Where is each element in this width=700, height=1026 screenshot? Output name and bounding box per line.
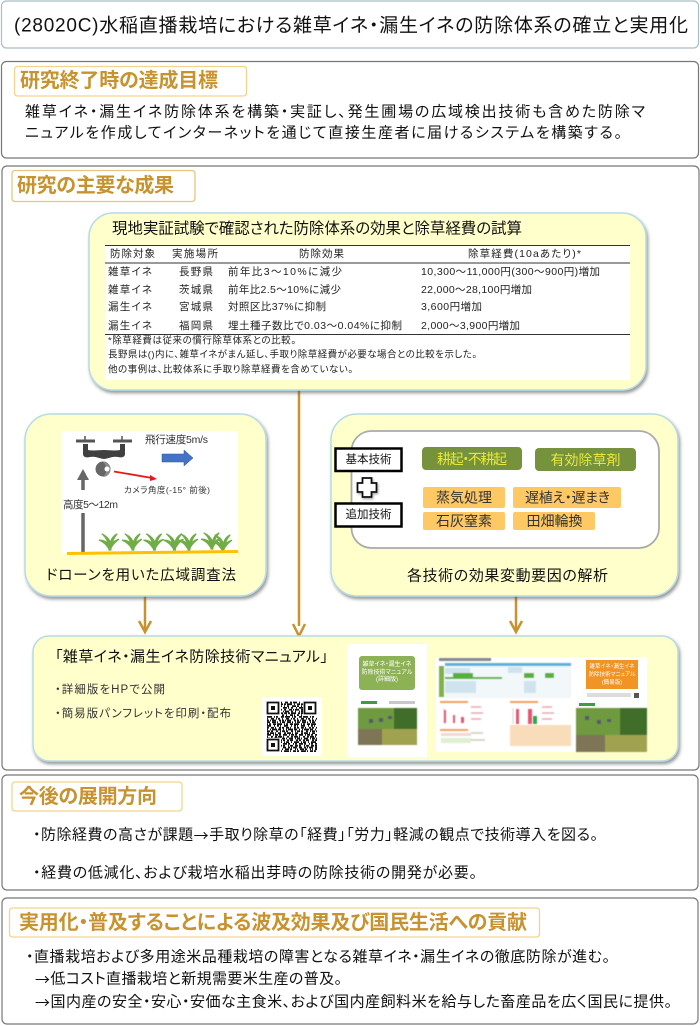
- chip: herbicide: [535, 448, 636, 471]
- panel: field trial table: [89, 213, 646, 390]
- chip: late planting: [513, 487, 621, 508]
- caption: drone survey: ドローンを用いた広域調査法: [46, 567, 236, 584]
- chip: crop rotation: [513, 512, 595, 530]
- chip: lime nitrogen: 石灰窒素: [436, 513, 492, 529]
- heading: future direction: [12, 782, 182, 811]
- text block: contribution: →国内産の安全・安心・安価な主食米、および国内産飼料米を給与した畜産品を広く国民に提供。: [35, 992, 672, 1012]
- table row: Fukuoka: 埋土種子数比で0.03〜0.04%に抑制: [228, 319, 402, 332]
- chip: late planting: 遅植え・遅まき: [525, 490, 610, 506]
- table row: Miyagi: 漏生イネ: [108, 300, 152, 313]
- table row: Nagano: 前年比3〜10%に減少: [228, 265, 342, 278]
- table row: Ibaraki: 雑草イネ: [108, 283, 152, 296]
- table row: Nagano: [108, 265, 600, 278]
- panel: future direction: [2, 775, 698, 890]
- label: added techniques: 追加技術: [346, 507, 392, 521]
- manual bullets: ・詳細版をHPで公開: [55, 682, 165, 696]
- table header row: 実施場所: [172, 247, 218, 260]
- pamphlet cover: [576, 660, 647, 752]
- table row: Nagano: 雑草イネ: [108, 265, 152, 278]
- chip: herbicide: 有効除草剤: [550, 452, 620, 468]
- chip: lime nitrogen: [423, 512, 505, 530]
- manual bullets: ・簡易版パンフレットを印刷・配布: [55, 706, 231, 720]
- table footnotes: [108, 334, 477, 376]
- chip: steam: 蒸気処理: [436, 490, 492, 506]
- label: flight speed: 飛行速度5m/s: [145, 433, 208, 446]
- table row: Ibaraki: 前年比2.5〜10%に減少: [228, 283, 342, 296]
- table header row: 防除対象: [110, 247, 156, 260]
- pamphlet chart page: [439, 658, 571, 746]
- panel: drone survey: [25, 414, 266, 596]
- arrow: drone to manual: [139, 594, 151, 632]
- chip: tillage: [422, 447, 522, 470]
- arrow: altitude: [77, 469, 89, 552]
- text block: contribution: →低コスト直播栽培と新規需要米生産の普及。: [35, 968, 342, 990]
- thumbnail: pamphlet: [436, 657, 647, 752]
- title: (28020C)水稲直播栽培における雑草イネ・漏生イネの防除体系の確立と実用化: [14, 14, 688, 36]
- table row: Ibaraki: 茨城県: [179, 284, 213, 296]
- table header row: 防除効果: [299, 247, 344, 260]
- table header row: [110, 247, 581, 260]
- manual heading: 「雑草イネ・漏生イネ防除技術マニュアル」: [55, 648, 328, 666]
- pamphlet cover: (簡易版): [602, 678, 622, 686]
- chip: crop rotation: 田畑輪換: [526, 513, 582, 529]
- caption: technique analysis: 各技術の効果変動要因の解析: [407, 568, 608, 584]
- pamphlet cover: 防除技術マニュアル: [589, 670, 636, 678]
- label: added techniques: [336, 504, 402, 526]
- table footnotes: 長野県は()内に、雑草イネがまん延し、手取り除草経費が必要な場合との比較を示した。: [108, 348, 477, 360]
- label: basic techniques: [336, 448, 402, 471]
- manual bullets: [55, 682, 231, 720]
- chip: steam: [423, 487, 505, 508]
- panel: contribution: [2, 898, 698, 1024]
- panel: main results: [2, 166, 699, 770]
- label: altitude: 高度5〜12m: [63, 498, 118, 511]
- arrow: flight direction: [162, 450, 193, 466]
- table row: Miyagi: 宮城県: [179, 300, 213, 313]
- diagram: drone survey: [61, 431, 238, 554]
- table: [105, 245, 630, 380]
- table row: Fukuoka: [108, 319, 520, 332]
- ground line: [67, 552, 238, 554]
- heading: future direction: 今後の展開方向: [19, 785, 157, 808]
- technique diagram: [336, 431, 659, 548]
- arrow: analysis to manual: [510, 594, 522, 632]
- table row: Fukuoka: 漏生イネ: [108, 319, 152, 332]
- thumbnail: detailed manual: 雑草イネ・漏生イネ: [362, 660, 412, 668]
- table row: Ibaraki: 22,000〜28,100円増加: [421, 283, 532, 296]
- table row: Fukuoka: 福岡県: [179, 319, 213, 332]
- pamphlet cover: 雑草イネ・漏生イネ: [590, 662, 635, 670]
- heading: research goal: [14, 66, 246, 96]
- text block: future direction: [33, 824, 598, 882]
- text block: future direction: ・経費の低減化、および栽培水稲出芽時の防除技術の開発が必要。: [33, 864, 477, 882]
- table row: Fukuoka: 2,000〜3,900円増加: [421, 319, 520, 332]
- icon: QR code: [262, 697, 322, 756]
- chip: tillage: 耕起・不耕起: [437, 451, 507, 467]
- table row: Nagano: 10,300〜11,000円(300〜900円)増加: [421, 265, 600, 278]
- table header row: 除草経費(10aあたり)*: [468, 247, 581, 260]
- panel: technique analysis: [331, 414, 678, 596]
- panel: research goal: [2, 62, 698, 158]
- heading: contribution: 実用化・普及することによる波及効果及び国民生活への貢献: [19, 911, 527, 934]
- thumbnail: detailed manual: (詳細版): [376, 675, 398, 683]
- icon: rice plants: [99, 533, 232, 551]
- title: [2, 1, 698, 48]
- table row: Miyagi: [108, 300, 482, 313]
- table row: Miyagi: 対照区比37%に抑制: [228, 300, 326, 313]
- panel: manual: [33, 636, 678, 761]
- heading: main results: [12, 170, 195, 202]
- thumbnail: detailed manual: 防除技術マニュアル: [361, 668, 413, 676]
- heading: main results: 研究の主要な成果: [17, 173, 174, 197]
- text block: contribution: ・直播栽培および多用途米品種栽培の障害となる雑草イネ・漏生イネの徹底防除が進む。: [26, 948, 610, 966]
- table row: Miyagi: 3,600円増加: [421, 300, 482, 313]
- label: camera angle: カメラ角度(-15° 前後): [124, 485, 210, 495]
- text block: research goal: ニュアルを作成してインターネットを通じて直接生産者に届けるシステムを構築する。: [25, 124, 622, 142]
- arrow: camera angle: [114, 472, 157, 481]
- icon: drone: [76, 436, 132, 477]
- table row: Nagano: 長野県: [179, 266, 213, 278]
- table footnotes: 他の事例は、比較体系に手取り除草経費を含めていない。: [108, 364, 353, 376]
- thumbnail: detailed manual: [347, 644, 427, 757]
- table heading: 現地実証試験で確認された防除体系の効果と除草経費の試算: [112, 218, 522, 238]
- text block: contribution: [26, 948, 672, 1012]
- heading: research goal: 研究終了時の達成目標: [20, 68, 218, 92]
- text block: research goal: [25, 102, 645, 142]
- table row: Ibaraki: [108, 283, 532, 296]
- arrow: table to manual: [293, 388, 305, 636]
- text block: future direction: ・防除経費の高さが課題→手取り除草の「経費」「労力」軽減の観点で技術導入を図る。: [33, 824, 598, 846]
- text block: research goal: 雑草イネ・漏生イネ防除体系を構築・実証し、発生圃場の広域検出技術も含めた防除マ: [25, 102, 645, 120]
- table footnotes: *除草経費は従来の慣行除草体系との比較。: [108, 334, 296, 346]
- icon: plus: [358, 478, 376, 497]
- label: basic techniques: 基本技術: [346, 452, 392, 466]
